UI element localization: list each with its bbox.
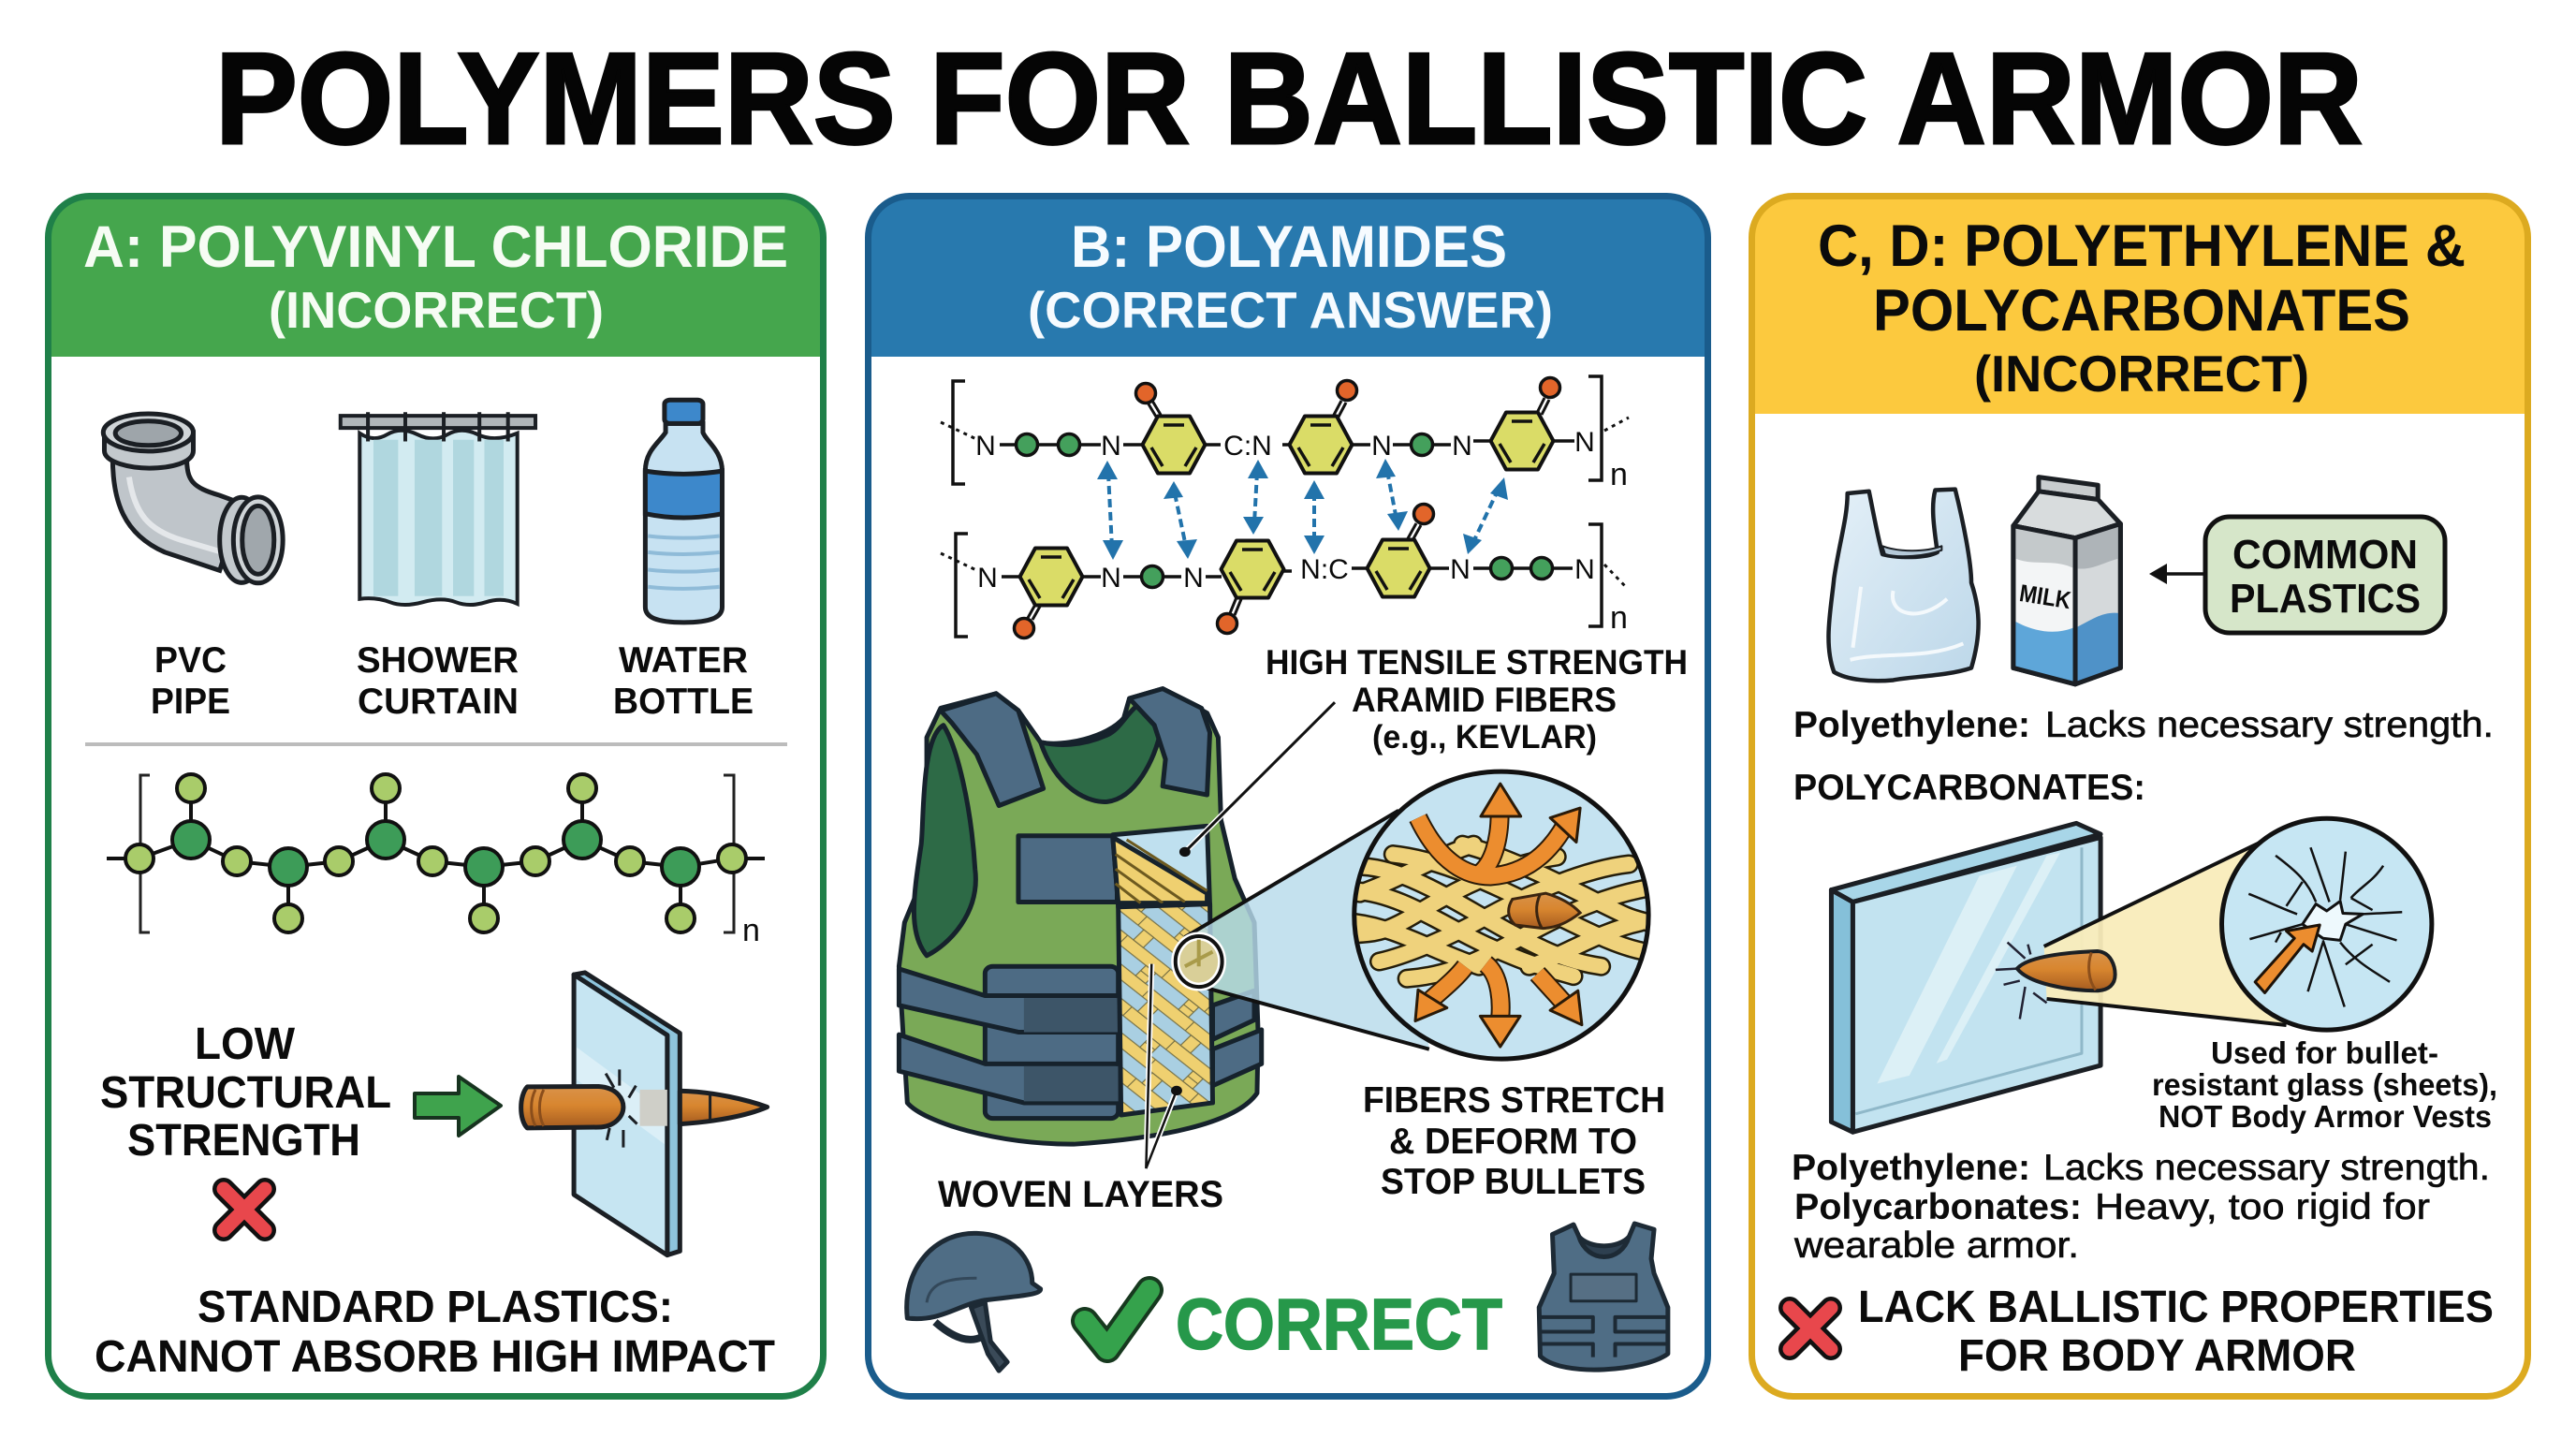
illustration: impact magnifier [1996,818,2432,1030]
panel A header band [49,197,824,357]
text: used for bullet-resistant glass: NOT Body Armor Vests [2159,1099,2492,1134]
panel A background [49,197,824,1397]
icon: milk carton [2013,477,2120,684]
label: aramid fibers: HIGH TENSILE STRENGTH [1266,643,1688,682]
text: explanation [1792,1148,2490,1266]
chart: aramid molecular chains: N [977,563,998,594]
item labels: PIPE [151,682,230,722]
panel C heading [1818,213,2466,403]
panel B heading: (CORRECT ANSWER) [1028,281,1553,339]
chart: aramid molecular chains: N [1101,431,1121,462]
text: used for bullet-resistant glass: resistant glass (sheets), [2152,1067,2497,1102]
panel C heading: (INCORRECT) [1974,345,2309,403]
text: polycarbonates label: POLYCARBONATES: [1793,768,2145,808]
icon: shower curtain [341,412,535,605]
text: standard plastics: CANNOT ABSORB HIGH IMPACT [95,1332,775,1382]
panel B heading: B: POLYAMIDES [1071,214,1507,280]
text: correct: CORRECT [1176,1284,1502,1365]
item labels [151,640,754,722]
panel: A polyvinyl chloride [49,197,824,1397]
text: fibers stretch: STOP BULLETS [1381,1162,1646,1202]
panel C background [1752,197,2527,1397]
panel B header band [869,197,1707,357]
panel A heading [83,214,788,339]
item labels: WATER [619,640,748,681]
icon: red X [224,1189,265,1230]
illustration: ballistic vest [899,689,1262,1144]
text: fibers stretch: FIBERS STRETCH [1363,1080,1665,1121]
text: explanation: Lacks necessary strength. [2043,1148,2490,1188]
icon: water bottle [645,400,723,623]
chart: aramid molecular chains: N [1183,563,1204,594]
panel B border [869,197,1707,1397]
callout: common plastics: PLASTICS [2230,576,2421,622]
icon: PVC pipe elbow [103,414,283,583]
panel: B polyamides [869,197,1707,1397]
chart: aramid molecular chains: N [1101,563,1121,594]
illustration: bullet through glass [521,973,768,1255]
callout: common plastics [2205,517,2445,633]
text: standard plastics [95,1283,775,1382]
text: lack ballistic properties: LACK BALLISTIC PROPERTIES [1858,1283,2494,1332]
text: milk: MILK [2017,579,2073,614]
panel: C, D polyethylene and polycarbonates [1752,197,2527,1397]
arrow: to common plastics [2149,564,2205,584]
chart: aramid molecular chains: n [1610,600,1628,636]
chart: aramid molecular chains: n [1610,457,1628,492]
panel A border [49,197,824,1397]
chart: PVC molecule [107,774,765,948]
icon: helmet [907,1233,1041,1371]
text: standard plastics: STANDARD PLASTICS: [198,1283,673,1332]
text: woven layers: WOVEN LAYERS [938,1174,1223,1215]
chart: PVC molecule: n [742,913,760,948]
chart: aramid molecular chains: N:C [1300,554,1349,585]
item labels: PVC [154,640,227,681]
label: aramid fibers: (e.g., KEVLAR) [1372,719,1597,756]
text: low structural strength: STRENGTH [127,1116,360,1166]
text: used for bullet-resistant glass: Used for bullet- [2211,1035,2438,1070]
item labels: BOTTLE [613,682,754,722]
panel A heading: (INCORRECT) [269,281,604,339]
text: lack ballistic properties: FOR BODY ARMOR [1958,1331,2356,1381]
text: explanation: Heavy, too rigid for [2095,1187,2430,1227]
chart: aramid molecular chains: N [975,431,996,462]
title: POLYMERS FOR BALLISTIC ARMOR [215,26,2363,171]
item labels: CURTAIN [358,682,519,722]
chart: aramid molecular chains: N [1450,554,1471,585]
label: aramid fibers: ARAMID FIBERS [1352,681,1617,719]
text: used for bullet-resistant glass [2152,1035,2497,1134]
illustration: glass sheet [1831,823,2100,1132]
leader lines [1146,702,1335,1168]
chart: aramid molecular chains: N [1574,427,1595,458]
text: polyethylene [1793,705,2494,745]
illustration: fiber weave close-up [1354,771,1648,1059]
icon: red X [1790,1308,1831,1349]
panel B background [869,197,1707,1397]
text: polyethylene: Polyethylene: [1793,705,2030,745]
chart: aramid molecular chains: N [1452,431,1472,462]
callout: common plastics: COMMON [2232,532,2418,578]
label: aramid fibers [1266,643,1688,756]
item labels: SHOWER [357,640,519,681]
illustration: magnifier cone [1176,811,1429,1049]
text: low structural strength: STRUCTURAL [100,1068,391,1118]
chart: aramid molecular chains: N [1371,431,1392,462]
panel A heading: A: POLYVINYL CHLORIDE [83,214,788,280]
text: polyethylene: Lacks necessary strength. [2045,705,2494,745]
panel B heading [1028,214,1553,339]
panel C heading: POLYCARBONATES [1873,278,2410,344]
panel C heading: C, D: POLYETHYLENE & [1818,213,2466,279]
text: low structural strength [100,1020,391,1166]
panel C border [1752,197,2527,1397]
icon: green arrow [415,1077,501,1136]
text: fibers stretch [1363,1080,1665,1202]
text: fibers stretch: & DEFORM TO [1389,1122,1637,1162]
icon: small vest [1539,1224,1668,1370]
text: explanation: Polycarbonates: [1794,1187,2082,1227]
text: explanation: wearable armor. [1793,1225,2079,1266]
icon: check mark [1085,1290,1149,1349]
text: lack ballistic properties [1858,1283,2494,1381]
chart: aramid molecular chains: N [1574,554,1595,585]
text: explanation: Polyethylene: [1792,1148,2030,1188]
arrows: hydrogen bonds [1097,459,1508,560]
text: low structural strength: LOW [195,1020,296,1069]
icon: plastic bag [1828,490,1979,681]
chart: aramid molecular chains [941,376,1629,638]
chart: aramid molecular chains: C:N [1223,431,1272,462]
panel C header band [1752,197,2527,414]
